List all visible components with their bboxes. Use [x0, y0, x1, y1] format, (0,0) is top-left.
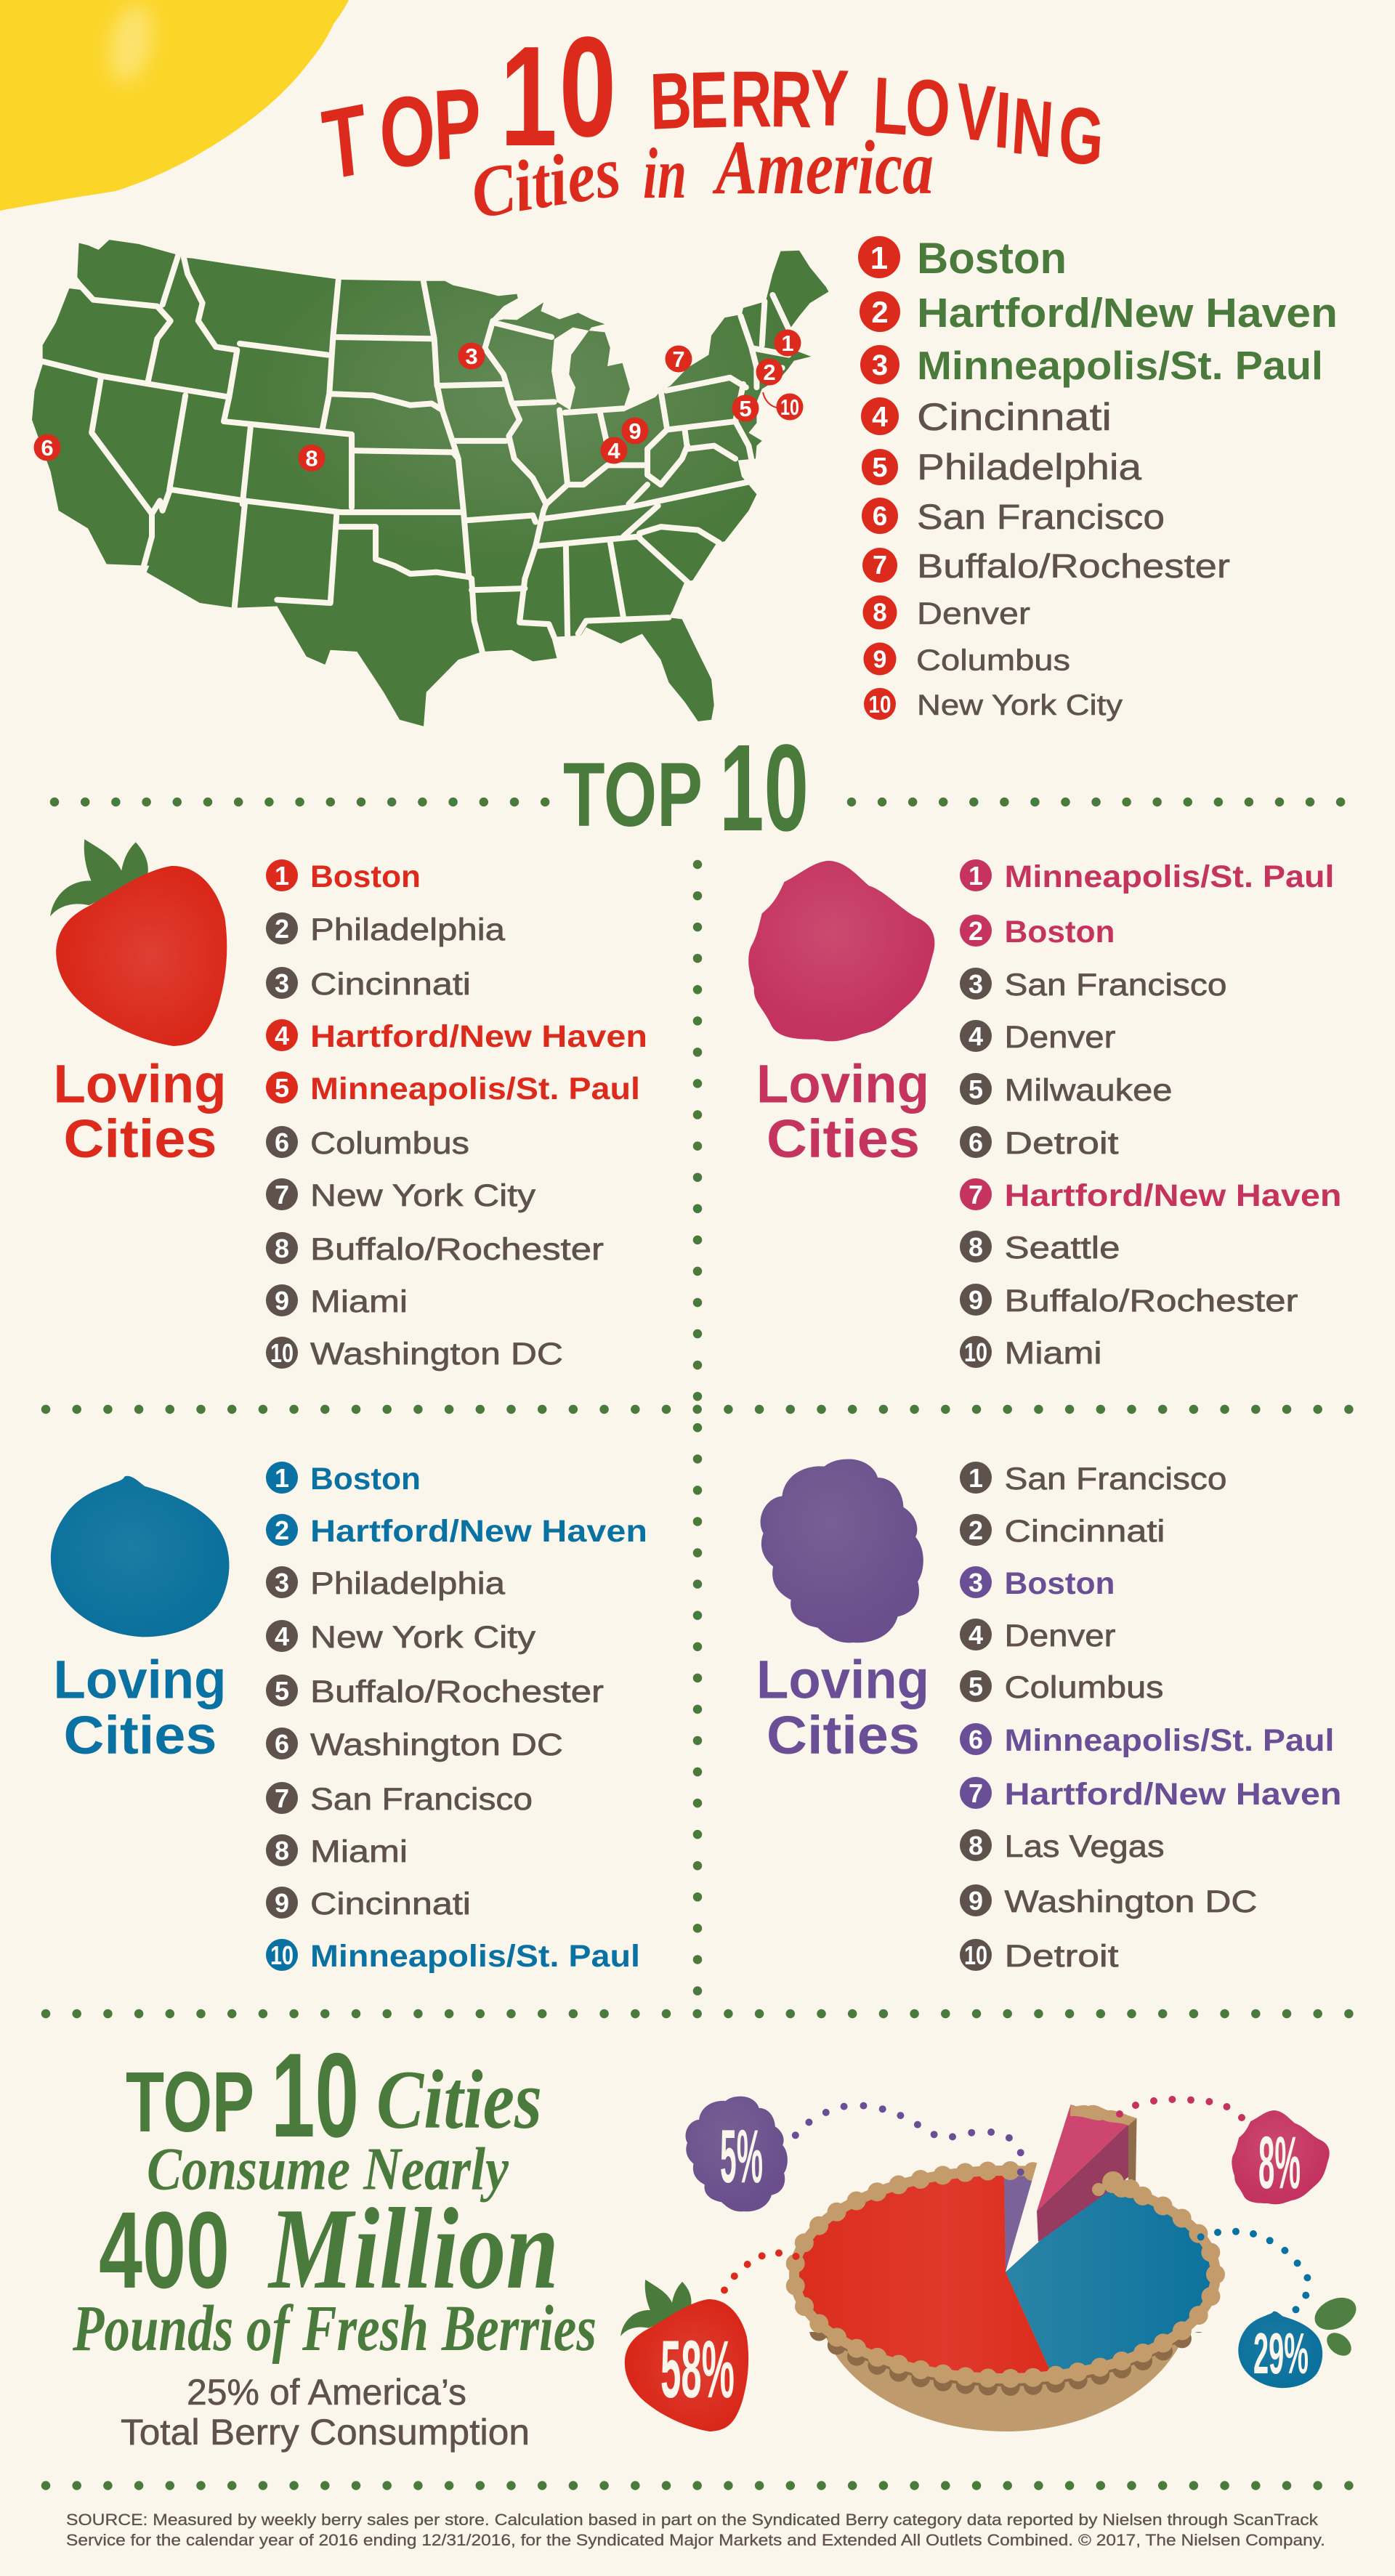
blueberry 29 percent	[1238, 2312, 1322, 2388]
list: blueberry: Boston	[310, 1462, 421, 1496]
list: strawberry: Washington DC	[310, 1337, 563, 1372]
heading: blueberry	[54, 1649, 227, 1765]
list: strawberry: Miami	[310, 1284, 408, 1319]
list: strawberry: 6	[275, 1127, 289, 1157]
map markers: 6	[41, 435, 54, 461]
list: raspberry: 3	[969, 969, 983, 999]
subtext: 25 percent of total consumption: 25% of America’s	[187, 2372, 466, 2413]
ranked city list: Hartford/New Haven	[917, 290, 1338, 336]
list: blueberry: 8	[275, 1836, 289, 1866]
title: America	[712, 125, 934, 210]
list: blackberry: Cincinnati	[1004, 1514, 1165, 1549]
ranked city list: San Francisco	[917, 498, 1165, 537]
list: blackberry: Boston	[1004, 1566, 1115, 1601]
list: blackberry: Minneapolis/St. Paul	[1004, 1723, 1334, 1758]
list: raspberry: 7	[969, 1180, 983, 1210]
list: raspberry: Minneapolis/St. Paul	[1004, 859, 1334, 894]
icon: blackberry	[761, 1459, 923, 1643]
heading: strawberry: Loving	[54, 1053, 227, 1114]
panel: blackberry loving cities	[756, 1459, 1341, 1974]
list: raspberry: 8	[969, 1232, 983, 1262]
title: 10	[500, 7, 616, 176]
panel: strawberry loving cities	[50, 839, 647, 1372]
subtext: 25 percent of total consumption: Total Berry Consumption	[121, 2412, 530, 2453]
strawberry 58 percent	[620, 2280, 748, 2431]
list: raspberry: Milwaukee	[1004, 1073, 1173, 1108]
heading: blueberry: Loving	[54, 1649, 227, 1710]
list: raspberry: 2	[969, 916, 983, 946]
list: blueberry: 2	[275, 1515, 289, 1545]
heading: raspberry: Loving	[756, 1053, 929, 1114]
crust scallops	[794, 2171, 1216, 2378]
raspberry 8 percent: 8%	[1258, 2121, 1301, 2204]
list: strawberry: 5	[275, 1073, 289, 1103]
list: strawberry: 2	[275, 914, 289, 944]
map markers	[33, 330, 804, 471]
icon: strawberry	[50, 839, 227, 1046]
icon: leaves	[1309, 2291, 1362, 2360]
source note: Service for the calendar year of 2016 ending 12/31/2016, for the Syndicated Major Markets and Extended All Outlets Combined. © 2017, The Nielsen Company.	[66, 2531, 1325, 2549]
ranked city list: 5	[872, 453, 888, 483]
list: blueberry: 1	[275, 1463, 289, 1493]
map markers: 4	[607, 438, 620, 463]
list: blueberry: 6	[275, 1729, 289, 1759]
list: strawberry: Philadelphia	[310, 912, 505, 947]
list: blackberry: 6	[969, 1725, 983, 1754]
ranked city list: Denver	[917, 596, 1030, 631]
ranked city list: Buffalo/Rochester	[917, 547, 1230, 585]
list: raspberry: 1	[969, 861, 983, 891]
list: blueberry: New York City	[310, 1620, 536, 1655]
list: strawberry: Boston	[310, 859, 421, 894]
list: strawberry: Buffalo/Rochester	[310, 1232, 604, 1267]
list: blueberry: Cincinnati	[310, 1887, 471, 1921]
ranked city list: Boston	[917, 234, 1067, 283]
list: blackberry: 2	[969, 1515, 983, 1545]
ranked city list: 9	[873, 646, 886, 673]
list: blueberry: 3	[275, 1568, 289, 1597]
headline: top 10 cities consume: Million	[267, 2184, 559, 2313]
list: blueberry: 5	[275, 1676, 289, 1706]
headline: top 10 cities consume: 10	[271, 2028, 359, 2162]
heading: strawberry	[54, 1053, 227, 1169]
pie slices	[799, 2176, 1210, 2373]
heading: blueberry: Cities	[64, 1705, 217, 1765]
blackberry 5 percent: 5%	[720, 2115, 763, 2199]
list: raspberry: Hartford/New Haven	[1004, 1178, 1341, 1213]
ranked city list: Columbus	[916, 644, 1070, 677]
list: raspberry: 6	[969, 1127, 983, 1157]
icon: blueberry	[51, 1476, 229, 1637]
pie dish	[825, 2333, 1186, 2431]
source note: SOURCE: Measured by weekly berry sales per store. Calculation based in part on the Syndicated Berry category data reported by Nielsen through ScanTrack	[66, 2511, 1319, 2529]
list: strawberry: 8	[275, 1234, 289, 1263]
list: blackberry: San Francisco	[1004, 1462, 1226, 1496]
ranked city list: Minneapolis/St. Paul	[917, 343, 1323, 388]
map markers: 5	[739, 396, 752, 421]
list: raspberry: 4	[969, 1021, 983, 1051]
ranked city list: 1	[870, 240, 888, 276]
list: blueberry: Washington DC	[310, 1728, 563, 1762]
ranked city list: 2	[871, 295, 889, 329]
map markers: 8	[305, 446, 318, 471]
list: blackberry: 9	[969, 1886, 983, 1916]
headline: top 10 cities consume	[72, 2028, 597, 2365]
list: raspberry: 9	[969, 1285, 983, 1315]
strawberry 58 percent: 58%	[660, 2324, 735, 2415]
list: blackberry	[960, 1462, 1341, 1974]
heading: blackberry: Cities	[767, 1705, 920, 1765]
map markers: 7	[672, 347, 685, 372]
list: blueberry: 4	[275, 1621, 289, 1651]
dotted dividers	[46, 802, 1351, 2486]
list: blackberry: 8	[969, 1831, 983, 1860]
ranked city list: New York City	[917, 689, 1123, 721]
list: strawberry: 7	[275, 1180, 289, 1210]
list: blueberry: 9	[275, 1888, 289, 1918]
ranked city list: 10	[869, 691, 891, 718]
pie crust	[794, 2171, 1216, 2386]
list: blackberry: 7	[969, 1778, 983, 1808]
title: Cities	[466, 131, 626, 234]
blackberry 5 percent	[685, 2097, 788, 2211]
list: blackberry: 10	[964, 1940, 987, 1970]
top 10 heading: TOP	[563, 745, 703, 846]
ranked city list: Philadelphia	[917, 447, 1141, 487]
subtext: 25 percent of total consumption	[121, 2372, 530, 2453]
panel: raspberry loving cities	[748, 859, 1341, 1371]
list: strawberry	[266, 859, 647, 1372]
headline: top 10 cities consume: Cities	[376, 2054, 542, 2146]
heading: blackberry	[756, 1649, 929, 1765]
list: blackberry: Las Vegas	[1004, 1829, 1164, 1864]
list: strawberry: Columbus	[310, 1126, 469, 1161]
list: blueberry: 10	[270, 1940, 294, 1970]
map markers: 10	[780, 394, 799, 420]
top 10 heading	[563, 719, 809, 857]
list: strawberry: 10	[270, 1338, 294, 1368]
headline: top 10 cities consume: Consume Nearly	[147, 2136, 509, 2203]
lifted raspberry slice	[1037, 2105, 1136, 2242]
list: raspberry: San Francisco	[1004, 968, 1226, 1003]
source note	[66, 2511, 1325, 2549]
ranked city list	[858, 234, 1338, 721]
headline: top 10 cities consume: 400	[99, 2189, 230, 2311]
title: BERRY	[649, 53, 849, 147]
list: blueberry: Buffalo/Rochester	[310, 1674, 604, 1709]
list: raspberry: 5	[969, 1074, 983, 1104]
chart: berry pie	[620, 2096, 1362, 2431]
list: raspberry: Detroit	[1004, 1126, 1119, 1161]
map markers: 9	[628, 418, 642, 444]
list: blackberry: 1	[969, 1463, 983, 1493]
list: blackberry: Hartford/New Haven	[1004, 1777, 1341, 1812]
headline: top 10 cities consume: Pounds of Fresh Berries	[72, 2293, 597, 2365]
list: blueberry: San Francisco	[310, 1782, 533, 1817]
ranked city list: 8	[873, 599, 887, 627]
ranked city list: 3	[872, 349, 888, 381]
list: blackberry: Detroit	[1004, 1939, 1119, 1974]
list: strawberry: New York City	[310, 1178, 536, 1213]
list: strawberry: 4	[275, 1021, 289, 1050]
list: blueberry: Miami	[310, 1834, 408, 1869]
ranked city list: 7	[873, 550, 887, 580]
raspberry 8 percent	[1232, 2110, 1330, 2204]
list: raspberry: Seattle	[1004, 1231, 1120, 1265]
list: strawberry: 3	[275, 968, 289, 998]
icon: raspberry	[748, 861, 934, 1041]
list: blackberry: Washington DC	[1004, 1884, 1257, 1919]
map markers: 1	[781, 331, 794, 356]
list: raspberry: 10	[964, 1337, 987, 1367]
list: blackberry: Denver	[1004, 1619, 1116, 1653]
title	[318, 7, 1107, 234]
US map	[32, 240, 828, 726]
list: strawberry: Cincinnati	[310, 967, 471, 1002]
list: raspberry: Denver	[1004, 1020, 1116, 1055]
list: blueberry: Minneapolis/St. Paul	[310, 1939, 640, 1974]
ranked city list: 4	[872, 402, 888, 433]
list: raspberry	[960, 859, 1341, 1371]
list: raspberry: Boston	[1004, 915, 1115, 949]
list: strawberry: Hartford/New Haven	[310, 1019, 647, 1054]
dotted connectors	[792, 2102, 1024, 2176]
list: blackberry: Columbus	[1004, 1670, 1164, 1705]
list: blueberry: Hartford/New Haven	[310, 1514, 647, 1549]
list: blackberry: 5	[969, 1672, 983, 1701]
headline: top 10 cities consume: TOP	[126, 2054, 254, 2150]
title: TOP	[318, 68, 483, 202]
top 10 heading: 10	[719, 719, 809, 857]
wedge gap	[1006, 2154, 1119, 2272]
title: in	[643, 133, 687, 214]
heading: blackberry: Loving	[756, 1649, 929, 1710]
blueberry 29 percent: 29%	[1253, 2321, 1309, 2386]
list: blueberry: Philadelphia	[310, 1566, 505, 1601]
ranked city list: Cincinnati	[917, 396, 1112, 439]
map markers: 2	[763, 360, 776, 385]
list: blackberry: 3	[969, 1568, 983, 1597]
list: raspberry: Buffalo/Rochester	[1004, 1284, 1298, 1319]
decorative yellow lemon blob	[0, 0, 349, 211]
heading: strawberry: Cities	[64, 1109, 217, 1169]
list: strawberry: 9	[275, 1286, 289, 1316]
list: blackberry: 4	[969, 1620, 983, 1650]
ranked city list: 6	[873, 501, 887, 531]
map markers: 3	[465, 344, 478, 369]
panel: blueberry loving cities	[51, 1462, 647, 1974]
heading: raspberry: Cities	[767, 1109, 920, 1169]
list: raspberry: Miami	[1004, 1336, 1101, 1371]
list: blueberry	[266, 1462, 647, 1974]
list: strawberry: 1	[275, 861, 289, 891]
heading: raspberry	[756, 1053, 929, 1169]
list: blueberry: 7	[275, 1783, 289, 1813]
list: strawberry: Minneapolis/St. Paul	[310, 1072, 640, 1106]
title: LOVING	[871, 60, 1107, 183]
crust over slice	[1092, 2171, 1140, 2198]
